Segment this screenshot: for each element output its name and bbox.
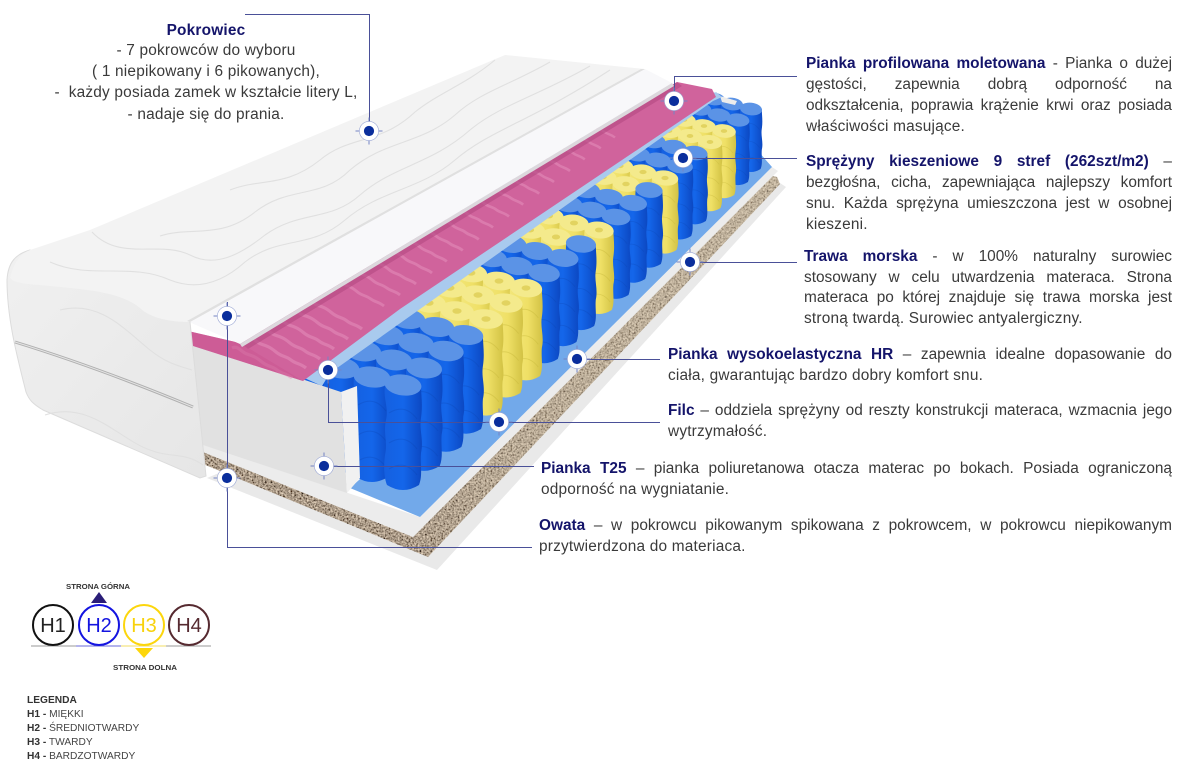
cover top face: [10, 55, 645, 322]
text: Pianka T25: Pianka T25 – pianka poliuretanowa otacza materac po bokach. Posiada ograniczoną: [541, 460, 1172, 477]
text: Filc: wytrzymałość.: [668, 423, 767, 440]
H4: [169, 605, 209, 645]
text: Pianka profilowana moletowana: gęstości, zapewnia dobrą odporność na: [806, 76, 1172, 93]
pocket springs: [290, 86, 763, 490]
hardness diagram: [31, 582, 211, 672]
text: Pokrowiec: ( 1 niepikowany i 6 pikowanych),: [92, 63, 320, 80]
text: Sprężyny kieszeniowe: [806, 153, 1172, 233]
H2: [79, 605, 119, 645]
text: Pokrowiec: - każdy posiada zamek w kształcie litery L,: [54, 84, 358, 101]
cover quilting waves: [45, 60, 610, 465]
text: Trawa morska: materaca po której znajduje się trawa morska jest: [804, 289, 1172, 306]
text: Sprężyny kieszeniowe: bezgłośna, cicha, zapewniająca najlepszy komfort: [806, 174, 1172, 191]
legend: [27, 695, 139, 762]
text: Trawa morska: stosowany w celu utwardzenia materaca. Strona: [804, 269, 1172, 286]
bottom side marker: [113, 648, 178, 672]
legend: H3 - TWARDY: [27, 737, 93, 748]
white top foam layer: [189, 69, 674, 347]
top side marker: [66, 582, 131, 603]
text: Owata: Owata – w pokrowcu pikowanym spikowana z pokrowcem, w pokrowcu niepikowanym: [539, 517, 1172, 534]
leader lines: [228, 14, 797, 548]
text: Pianka profilowana moletowana: właściwości masujące.: [806, 118, 965, 135]
text: Sprężyny kieszeniowe: kieszeni.: [806, 216, 868, 233]
bottom side marker: STRONA DOLNA: [113, 663, 178, 672]
bottom white base layer: [207, 183, 786, 570]
upper felt strip: [300, 92, 737, 386]
H1: [33, 605, 73, 645]
legend: H2 - ŚREDNIOTWARDY: [27, 723, 139, 734]
text: Trawa morska: stroną twardą. Surowiec antyalergiczny.: [804, 310, 1083, 327]
text: Owata: przytwierdzona do materiaca.: [539, 538, 746, 555]
text: Pianka wysokoelastyczna HR: Pianka wysokoelastyczna HR – zapewnia idealne dopasowanie do: [668, 346, 1172, 363]
text: Pianka wysokoelastyczna HR: ciała, gwarantując bardzo dobry komfort snu.: [668, 367, 983, 384]
text: Filc: [668, 402, 1172, 440]
text: Pokrowiec: - nadaje się do prania.: [128, 106, 284, 123]
blue felt base: [350, 150, 772, 517]
H4: H4: [176, 615, 202, 637]
text: Pokrowiec: [54, 22, 358, 123]
text: Owata: [539, 517, 1172, 555]
text: Pianka profilowana moletowana: Pianka profilowana moletowana - Pianka o dużej: [806, 55, 1172, 72]
text: Pokrowiec: Pokrowiec: [167, 22, 245, 39]
H3: [124, 605, 164, 645]
legend: H1 - MIĘKKI: [27, 709, 84, 720]
cover side face: [7, 250, 206, 478]
text: Pianka profilowana moletowana: odkształcenia, poprawia krążenie krwi oraz posiada: [806, 97, 1172, 114]
legend: H4 - BARDZOTWARDY: [27, 751, 135, 762]
legend: LEGENDA: [27, 695, 77, 706]
text: Pianka wysokoelastyczna HR: [668, 346, 1172, 384]
H1: H1: [40, 615, 66, 637]
text: Pianka profilowana moletowana: [806, 55, 1172, 135]
profiled pink foam: [188, 82, 716, 381]
T25 foam side panel: [190, 342, 360, 493]
white foam band: [203, 167, 778, 537]
text: Trawa morska: Trawa morska - w 100% naturalny surowiec: [804, 248, 1172, 265]
text: Trawa morska: [804, 248, 1172, 327]
H3: H3: [131, 615, 157, 637]
text: Pianka T25: [541, 460, 1172, 498]
target markers: [214, 88, 704, 492]
H2: H2: [86, 615, 112, 637]
zipper: [15, 342, 193, 407]
text: Sprężyny kieszeniowe: snu. Każda sprężyna umieszczona jest w osobnej: [806, 195, 1172, 212]
text: Filc: Filc – oddziela sprężyny od reszty konstrukcji materaca, wzmacnia jego: [668, 402, 1172, 419]
coconut mat layer: [203, 175, 780, 557]
quilted cover: [7, 55, 645, 478]
text: Sprężyny kieszeniowe: Sprężyny kieszeniowe 9 stref (262szt/m2) –: [806, 153, 1172, 170]
top side marker: STRONA GÓRNA: [66, 582, 131, 591]
text: Pokrowiec: - 7 pokrowców do wyboru: [116, 42, 296, 59]
text: Pianka T25: odporność na wygniatanie.: [541, 481, 729, 498]
